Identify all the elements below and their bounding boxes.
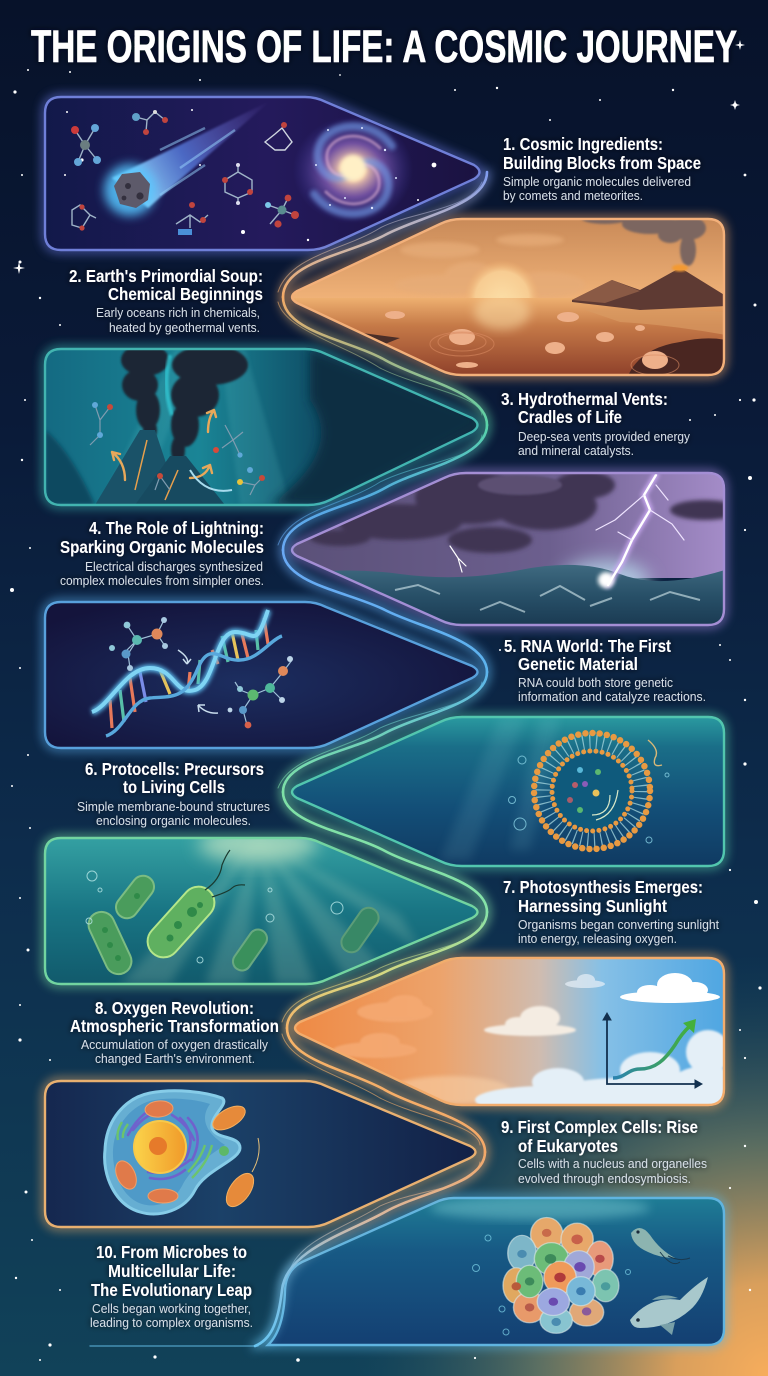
text: 1 cosmic ingredients	[503, 134, 701, 203]
line chart with rising arrow	[603, 1013, 702, 1088]
text: 5 RNA world: RNA could both store genetic	[518, 676, 673, 690]
text: 8 oxygen revolution: 8. Oxygen Revolution:	[95, 998, 254, 1018]
panel 6: protocells	[285, 717, 725, 867]
icon: comet	[104, 101, 270, 216]
text: 2 primordial soup: heated by geothermal vents.	[109, 321, 260, 335]
text: 3 hydrothermal vents: Cradles of Life	[518, 407, 622, 427]
text: 1 cosmic ingredients: Simple organic molecules delivered	[503, 175, 691, 189]
clouds	[333, 995, 433, 1058]
icon: sun	[470, 264, 534, 298]
panel 5: RNA world	[45, 602, 485, 748]
bubbling domes	[385, 311, 668, 369]
text: 7 photosynthesis	[503, 877, 719, 946]
text: 5 RNA world: 5. RNA World: The First	[504, 636, 671, 656]
text: 7 photosynthesis: Organisms began converting sunlight	[518, 918, 719, 932]
text: 4 role of lightning: Sparking Organic Molecules	[60, 537, 264, 557]
text: 4 role of lightning	[60, 518, 264, 588]
text: 10 multicellular life	[90, 1242, 253, 1330]
vent chimneys	[96, 430, 166, 504]
vent smoke	[121, 344, 248, 464]
panel 2: primordial soup	[285, 212, 726, 376]
icon: RNA helix	[92, 610, 282, 736]
panel 10: multicellular life	[265, 1196, 725, 1346]
text: 6 protocells: enclosing organic molecules.	[96, 814, 251, 828]
text: 10 multicellular life: Multicellular Life:	[108, 1261, 236, 1281]
lightning bolts	[450, 475, 684, 585]
icon: protocell	[534, 733, 662, 849]
text: 10 multicellular life: leading to complex organisms.	[90, 1316, 253, 1330]
text: 3 hydrothermal vents: and mineral catalysts.	[518, 444, 634, 458]
text: 1 cosmic ingredients: Building Blocks from Space	[503, 153, 701, 173]
bubbles	[472, 1235, 630, 1335]
text: 9 complex cells: evolved through endosymbiosis.	[518, 1172, 691, 1186]
text: 7 photosynthesis: 7. Photosynthesis Emerges:	[503, 877, 703, 897]
flowing ribbon connecting the panels	[90, 172, 487, 1346]
text: 9 complex cells	[501, 1117, 707, 1186]
icon: small organism	[631, 1228, 690, 1264]
icon: volcano	[572, 212, 726, 310]
text: 2 primordial soup: Early oceans rich in chemicals,	[96, 306, 260, 320]
text: 2 primordial soup: Chemical Beginnings	[108, 284, 263, 304]
text: 4 role of lightning: 4. The Role of Lightning:	[89, 518, 264, 538]
text: 6 protocells: to Living Cells	[123, 777, 225, 797]
text: 3 hydrothermal vents	[501, 389, 691, 458]
icon: fish	[630, 1277, 708, 1335]
text: 2 primordial soup	[69, 266, 263, 335]
text: 8 oxygen revolution: Atmospheric Transformation	[70, 1016, 279, 1036]
text: 4 role of lightning: Electrical discharges synthesized	[85, 560, 263, 574]
panel 7: photosynthesis	[45, 827, 485, 984]
text: 6 protocells: Simple membrane-bound structures	[77, 800, 270, 814]
bubbles	[86, 871, 343, 963]
bacteria	[84, 871, 383, 978]
text: 9 complex cells: of Eukaryotes	[518, 1136, 618, 1156]
icon: molecules	[71, 110, 299, 235]
vent molecules and arrows	[90, 402, 265, 495]
text: 6 protocells: 6. Protocells: Precursors	[85, 759, 264, 779]
text: 5 RNA world: Genetic Material	[518, 654, 638, 674]
text: 4 role of lightning: complex molecules from simpler ones.	[60, 574, 264, 588]
text: 10 multicellular life: Cells began working together,	[92, 1302, 251, 1316]
panel 3: hydrothermal vents	[45, 344, 490, 505]
icon: cell cluster	[503, 1217, 619, 1333]
text: 10 multicellular life: The Evolutionary Leap	[91, 1280, 252, 1300]
molecules and arrows	[109, 617, 293, 728]
panel 8: oxygen revolution	[285, 958, 743, 1114]
panel 4: lightning	[285, 471, 740, 626]
sunlight rays	[122, 852, 416, 983]
text: 3 hydrothermal vents: 3. Hydrothermal Vents:	[501, 389, 668, 409]
text: 5 RNA world	[504, 636, 706, 704]
text: 7 photosynthesis: into energy, releasing oxygen.	[518, 932, 677, 946]
text: 8 oxygen revolution: changed Earth's environment.	[95, 1052, 255, 1066]
text: 1 cosmic ingredients: by comets and meteorites.	[503, 189, 643, 203]
text: 9 complex cells: Cells with a nucleus and organelles	[518, 1157, 707, 1171]
text: 6 protocells	[77, 759, 270, 828]
stormy sea	[333, 564, 723, 624]
text: 5 RNA world: information and catalyze reactions.	[518, 690, 706, 704]
panel 1: cosmic ingredients	[45, 97, 485, 250]
text: 9 complex cells: 9. First Complex Cells: Rise	[501, 1117, 698, 1137]
clouds	[402, 234, 562, 272]
text: 3 hydrothermal vents: Deep-sea vents provided energy	[518, 430, 691, 444]
icon: eukaryotic cell	[105, 1091, 240, 1214]
text: 1 cosmic ingredients: 1. Cosmic Ingredients:	[503, 134, 663, 154]
bubbles	[508, 756, 669, 843]
text: 2 primordial soup: 2. Earth's Primordial Soup:	[69, 266, 263, 286]
panel 9: complex cells	[45, 1081, 485, 1227]
text: 10 multicellular life: 10. From Microbes to	[96, 1242, 247, 1262]
text: 8 oxygen revolution	[70, 998, 279, 1066]
icon: bacteria	[212, 1106, 260, 1208]
text: 8 oxygen revolution: Accumulation of oxygen drastically	[81, 1038, 269, 1052]
text: 7 photosynthesis: Harnessing Sunlight	[518, 896, 667, 916]
icon: galaxy	[298, 118, 409, 222]
storm clouds	[310, 471, 740, 553]
